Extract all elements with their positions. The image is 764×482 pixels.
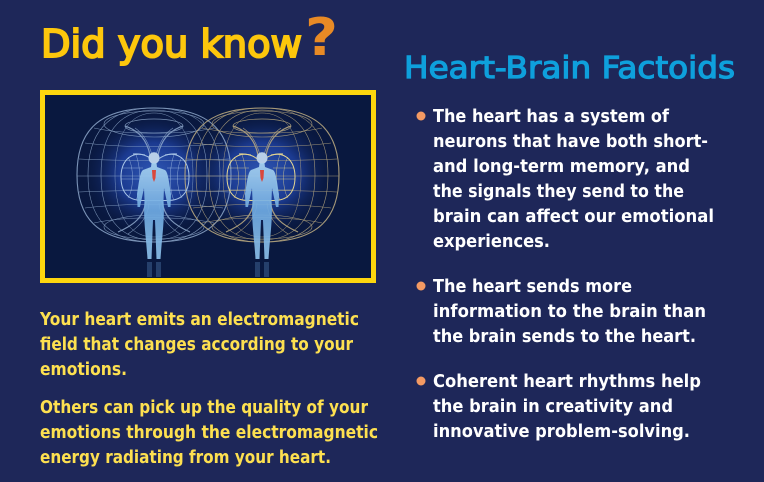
bullet item 2: information to the brain than — [433, 301, 706, 322]
bullet item 1: experiences. — [433, 231, 550, 252]
left field wireframe — [77, 108, 231, 242]
paragraph 1: emotions. — [40, 359, 127, 380]
bullet item 2 — [416, 276, 706, 347]
bullet item 3: Coherent heart rhythms help — [433, 371, 701, 392]
bullet item 1: The heart has a system of — [433, 106, 669, 127]
title: Did you know: Did you know — [41, 22, 302, 66]
paragraph 2 — [40, 397, 378, 468]
list: factoids — [416, 106, 714, 442]
bullet item 3: innovative problem-solving. — [433, 421, 690, 442]
bullet item 2: The heart sends more — [433, 276, 632, 297]
right person glow — [190, 112, 334, 236]
bullet item 1: the signals they send to the — [433, 181, 684, 202]
left inner field — [121, 154, 189, 201]
paragraph 2: Others can pick up the quality of your — [40, 397, 368, 418]
paragraph 2: energy radiating from your heart. — [40, 447, 331, 468]
bullet item 1: brain can affect our emotional — [433, 206, 714, 227]
heading: Heart-Brain Factoids: Heart-Brain Factoids — [404, 51, 735, 86]
right figure — [245, 152, 279, 259]
icon: question mark: ? — [305, 8, 338, 68]
bullet item 1: neurons that have both short- — [433, 131, 708, 152]
figure reflections — [147, 262, 269, 277]
bullet item 3 — [416, 371, 701, 442]
right inner field — [227, 154, 295, 201]
paragraph 1: field that changes according to your — [40, 334, 353, 355]
left figure — [137, 152, 171, 259]
bullet item 1 — [416, 106, 714, 252]
text block: left paragraphs — [39, 309, 378, 468]
right field wireframe — [185, 108, 339, 242]
paragraph 1 — [39, 309, 359, 380]
title: Did you know — [41, 8, 338, 68]
panel: framed toroidal field image — [42, 92, 374, 280]
paragraph 2: emotions through the electromagnetic — [40, 422, 378, 443]
bullet item 1: and long-term memory, and — [433, 156, 690, 177]
bullet item 3: the brain in creativity and — [433, 396, 673, 417]
left person glow — [82, 112, 226, 236]
paragraph 1: Your heart emits an electromagnetic — [39, 309, 359, 330]
bullet item 2: the brain sends to the heart. — [433, 326, 696, 347]
